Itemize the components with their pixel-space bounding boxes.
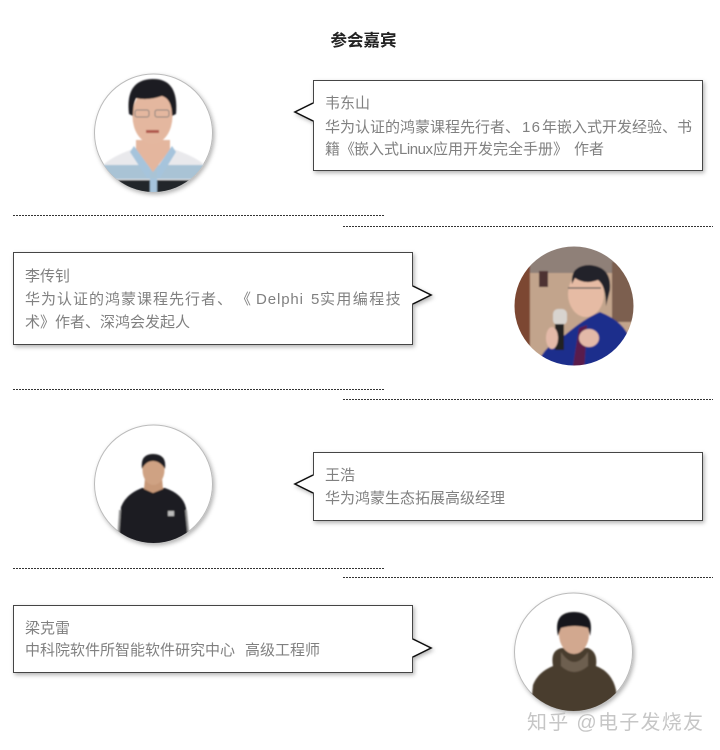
portrait: 梁克雷 bbox=[514, 593, 632, 715]
portrait: 王浩 bbox=[94, 425, 212, 545]
title: 参会嘉宾 bbox=[330, 30, 396, 50]
callout: 王浩 bbox=[294, 452, 702, 520]
divider bbox=[13, 216, 713, 578]
speaker bio: 华为认证的鸿蒙课程先行者、 bbox=[25, 291, 233, 308]
speaker bio: 应用开发完全手册》 bbox=[433, 140, 568, 158]
callout: 梁克雷 bbox=[14, 606, 432, 672]
portrait: 李传钊 bbox=[514, 246, 634, 366]
callout: 韦东山 bbox=[294, 80, 702, 170]
speaker bio: 华为鸿蒙生态拓展高级经理 bbox=[325, 490, 505, 507]
speaker bio: 实用编程技 bbox=[320, 291, 402, 308]
speaker bio: 高级工程师 bbox=[245, 642, 320, 659]
speaker bio: 嵌入式 bbox=[354, 141, 399, 158]
speaker name: 韦东山 bbox=[325, 95, 370, 112]
speaker bio: Delphi bbox=[256, 291, 303, 308]
speaker bio: Linux bbox=[399, 141, 434, 158]
speaker bio: 籍《 bbox=[325, 141, 355, 158]
speaker bio: 年嵌入式开发经验、书 bbox=[542, 119, 692, 136]
speaker bio: 《 bbox=[236, 291, 251, 308]
speaker bio: 16 bbox=[522, 119, 540, 136]
speaker bio: 作者 bbox=[574, 141, 604, 158]
watermark: 知乎 @电子发烧友 bbox=[527, 711, 703, 734]
callout: 李传钊 bbox=[14, 252, 432, 344]
speaker name: 梁克雷 bbox=[25, 620, 70, 637]
portrait: 韦东山 bbox=[94, 74, 212, 200]
speaker name: 王浩 bbox=[325, 467, 355, 484]
speaker bio bbox=[25, 291, 402, 331]
speaker bio bbox=[325, 119, 692, 158]
speaker bio: 华为认证的鸿蒙课程先行者、 bbox=[325, 119, 520, 136]
speaker bio: 术》作者、深鸿会发起人 bbox=[25, 314, 190, 331]
speaker name: 李传钊 bbox=[25, 268, 70, 285]
speaker bio: 5 bbox=[311, 291, 319, 308]
speaker bio: 中科院软件所智能软件研究中心 bbox=[25, 642, 235, 659]
